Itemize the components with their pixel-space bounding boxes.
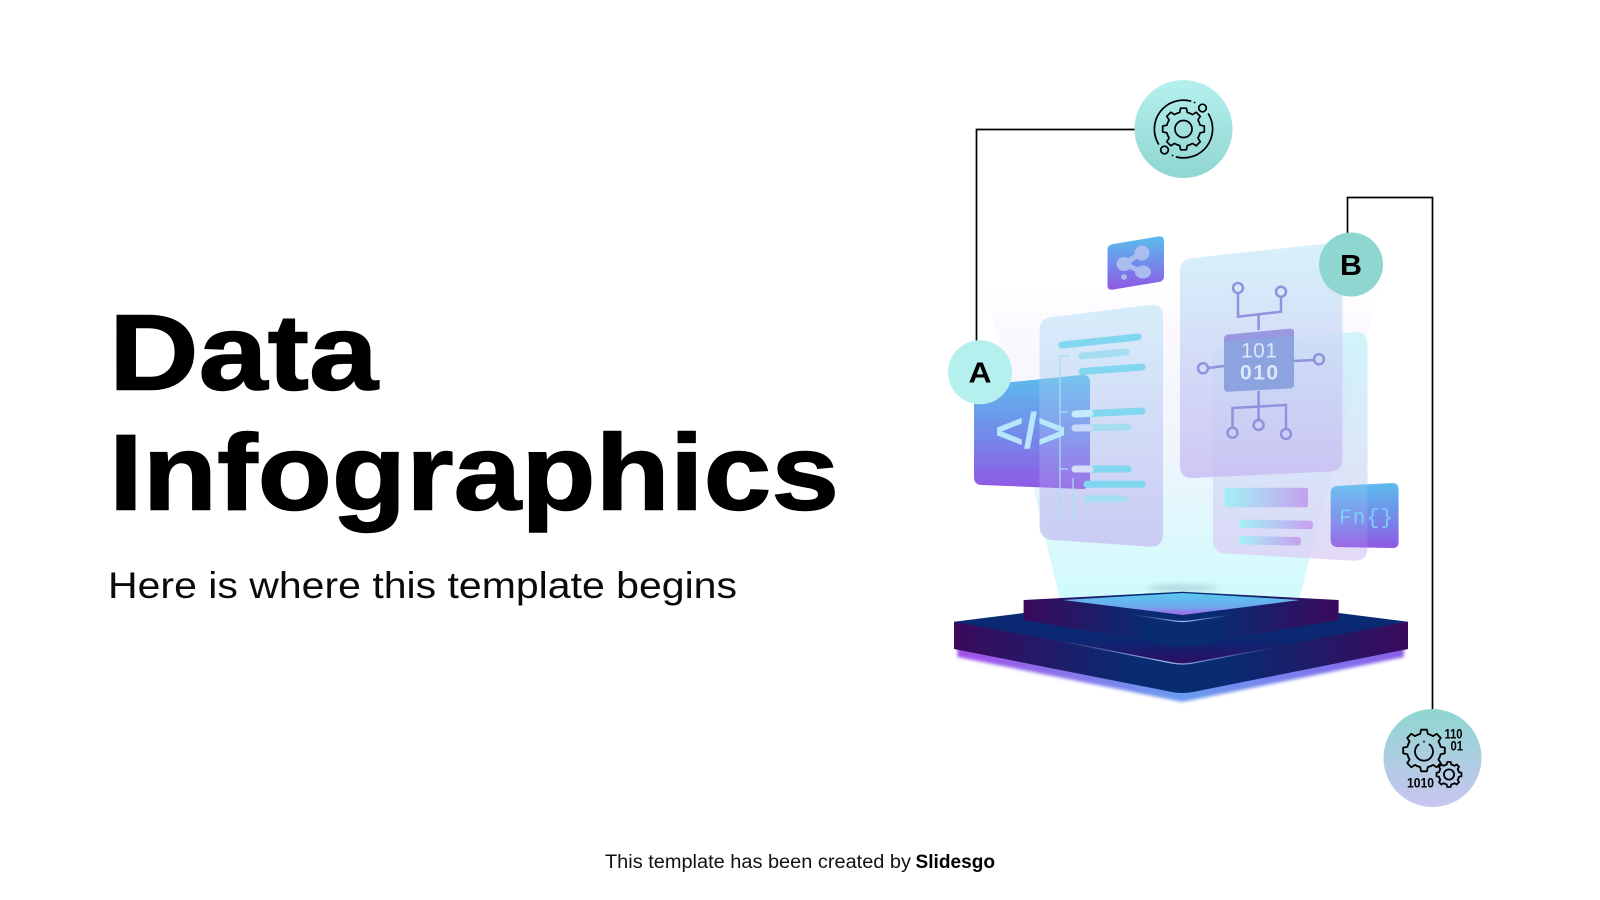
- upper step top face: [1024, 592, 1339, 622]
- circuit glass panel: [1180, 242, 1342, 478]
- subtitle: Here is where this template begins: [108, 565, 737, 606]
- lower step top face: [954, 613, 1408, 664]
- back glass panel: [1213, 332, 1368, 561]
- code lines: [1062, 337, 1142, 499]
- upper step side: [1024, 600, 1339, 647]
- code tile seen through glass: [1040, 375, 1090, 489]
- badge A: [948, 340, 1012, 404]
- title line: Data: Data: [109, 292, 379, 412]
- chip binary digits: 101: [1241, 340, 1277, 363]
- badge: data gears: [1384, 709, 1482, 807]
- badge B: [1319, 232, 1383, 296]
- lower step side: [954, 622, 1408, 693]
- lower step front highlight: [1055, 640, 1277, 664]
- letter B: B: [1340, 250, 1362, 282]
- connector line: B to data gears: [1348, 198, 1432, 710]
- screen shadow: [1146, 585, 1218, 591]
- share icon: [1117, 246, 1150, 279]
- binary digits: 1010: [1407, 774, 1434, 790]
- binary digits: 110: [1444, 726, 1463, 742]
- icon: small gear: [1437, 762, 1461, 787]
- badge: orbiting gear: [1134, 80, 1232, 178]
- connector line: gear to A: [976, 130, 1135, 342]
- footer brand: Slidesgo: [916, 852, 995, 873]
- code tile: [974, 375, 1090, 489]
- binary digits: 01: [1450, 738, 1463, 754]
- glass overlap tint: [1331, 484, 1368, 548]
- share tile: [1108, 236, 1164, 290]
- binary digits: [1407, 726, 1463, 790]
- platform: [954, 585, 1408, 702]
- icon: large gear with power symbol: [1403, 730, 1445, 771]
- footer credit: This template has been created by: [605, 852, 912, 873]
- chart card bars: [1225, 488, 1313, 546]
- platform under-glow: [958, 647, 1404, 702]
- code symbol: </>: [995, 403, 1066, 459]
- code tree guides: [1060, 355, 1080, 524]
- glowing screen: [1063, 593, 1300, 615]
- function tile: [1331, 483, 1399, 548]
- hologram light beam: [985, 285, 1380, 600]
- code listing glass panel: [997, 304, 1163, 547]
- illustration: holographic data platform: [954, 236, 1408, 702]
- title line: Infographics: Infographics: [109, 412, 839, 532]
- binary chip: 010: [1240, 361, 1278, 384]
- icon: orbit gear: [1154, 100, 1213, 158]
- circuit wiring: [1198, 283, 1324, 439]
- upper step front highlight: [1134, 615, 1232, 622]
- title: [109, 292, 839, 532]
- function label: Fn{}: [1339, 508, 1393, 530]
- binary chip: [1224, 329, 1294, 392]
- letter A: A: [968, 358, 992, 390]
